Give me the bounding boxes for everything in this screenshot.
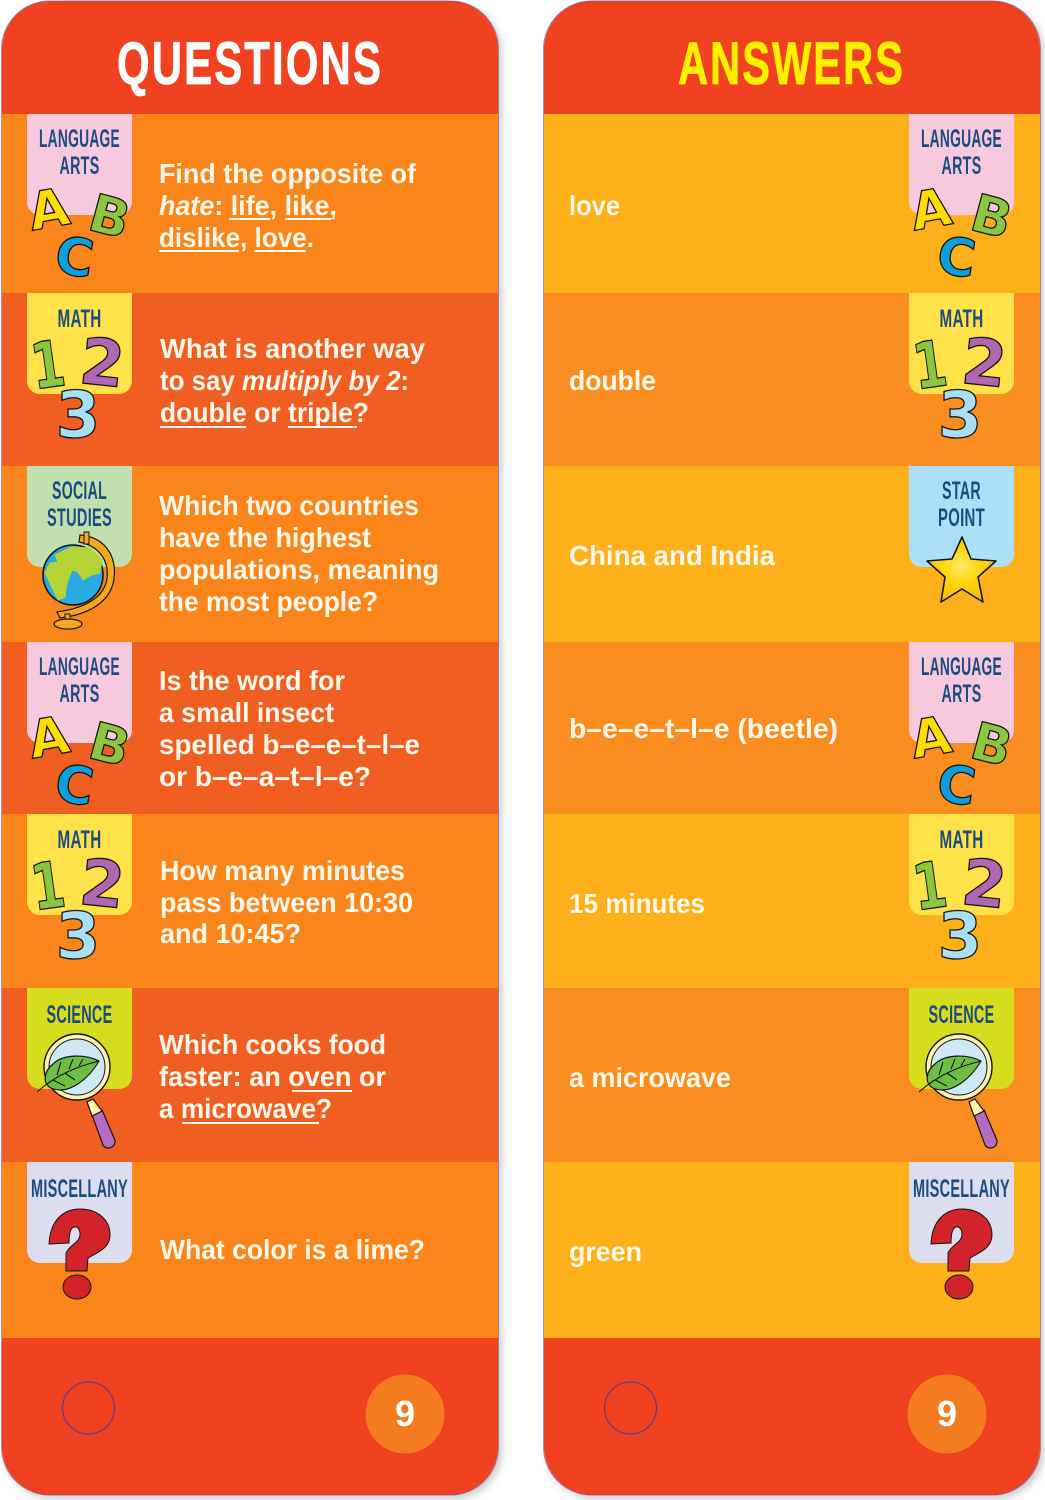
icon: numbers 123: 1 xyxy=(26,326,70,405)
icon: numbers 123 xyxy=(26,846,128,974)
page number badge xyxy=(366,1374,444,1454)
tab: language arts: ARTS xyxy=(942,152,982,180)
punch hole xyxy=(604,1382,656,1434)
icon: letters abc: B xyxy=(964,183,1018,252)
question 7: What color is a lime? xyxy=(160,1234,425,1265)
icon: numbers 123: 2 xyxy=(76,846,128,924)
icon: numbers 123: 3 xyxy=(56,900,100,974)
page number badge: 9 xyxy=(395,1393,415,1434)
question 4: spelled b–e–e–t–l–e xyxy=(159,729,420,760)
tab: math: MATH xyxy=(940,826,984,854)
tab: language arts: ARTS xyxy=(60,680,100,708)
tab: language arts: LANGUAGE xyxy=(39,125,120,153)
tab: language arts xyxy=(24,114,136,291)
icon: numbers 123: 1 xyxy=(26,847,70,926)
icon: numbers 123: 3 xyxy=(938,900,982,974)
tab: science xyxy=(27,988,132,1148)
punch hole xyxy=(62,1382,114,1434)
icon: numbers 123: 3 xyxy=(56,379,100,453)
question 4: or b–e–a–t–l–e? xyxy=(159,761,371,792)
tab: language arts xyxy=(906,642,1018,819)
question 2: double or triple? xyxy=(160,397,369,428)
heading: questions: QUESTIONS xyxy=(117,30,383,97)
icon: letters abc xyxy=(24,705,136,819)
icon: letters abc: B xyxy=(964,711,1018,780)
question 3: Which two countries xyxy=(159,490,419,521)
heading: answers: ANSWERS xyxy=(678,30,905,97)
tab: star point xyxy=(909,466,1014,602)
question 4 xyxy=(159,665,420,792)
tab: science: SCIENCE xyxy=(46,1001,112,1029)
icon: letters abc: B xyxy=(82,711,136,780)
question 4: Is the word for xyxy=(159,665,345,696)
page number badge: 9 xyxy=(937,1393,957,1434)
icon: star xyxy=(927,537,996,602)
question 6 xyxy=(159,1029,386,1124)
question 5 xyxy=(160,855,413,949)
answer 5: 15 minutes xyxy=(569,888,705,919)
question 3 xyxy=(159,490,439,617)
question 2: What is another way xyxy=(160,333,425,364)
question 4: a small insect xyxy=(159,697,334,728)
tab: language arts xyxy=(906,114,1018,291)
icon: globe xyxy=(43,532,114,629)
answer 2: double xyxy=(569,365,656,396)
question 2 xyxy=(160,333,425,428)
icon: numbers 123 xyxy=(908,325,1010,453)
page number badge xyxy=(908,1374,986,1454)
icon: letters abc xyxy=(906,705,1018,819)
icon: letters abc: C xyxy=(933,226,979,291)
tab: math xyxy=(26,814,132,974)
icon: letters abc: C xyxy=(51,226,97,291)
answer 1: love xyxy=(569,190,620,221)
answer 4: b–e–e–t–l–e (beetle) xyxy=(569,713,838,744)
question 6: faster: an oven or xyxy=(159,1061,386,1092)
tab: math xyxy=(908,293,1014,453)
icon: numbers 123 xyxy=(26,325,128,453)
icon: numbers 123: 1 xyxy=(908,847,952,926)
tab: language arts: ARTS xyxy=(60,152,100,180)
question 3: the most people? xyxy=(159,586,378,617)
answer 6: a microwave xyxy=(569,1062,731,1093)
tab: math xyxy=(908,814,1014,974)
icon: question mark xyxy=(49,1209,110,1299)
question 3: populations, meaning xyxy=(159,554,439,585)
icon: letters abc: B xyxy=(82,183,136,252)
icon: letters abc: A xyxy=(906,705,956,771)
icon: letters abc xyxy=(24,177,136,291)
panel: answers card xyxy=(544,1,1040,1495)
answer 7: green xyxy=(569,1236,642,1267)
tab: language arts: LANGUAGE xyxy=(39,653,120,681)
question 5: How many minutes xyxy=(160,855,405,886)
tab: social studies xyxy=(27,466,132,629)
icon: numbers 123: 2 xyxy=(958,846,1010,924)
icon: magnifying glass with leaf xyxy=(37,1034,115,1148)
question 1 xyxy=(159,158,417,253)
tab: math: MATH xyxy=(58,826,102,854)
tab: social studies: SOCIAL xyxy=(52,477,107,505)
tab: social studies: STUDIES xyxy=(47,504,112,532)
tab: language arts xyxy=(24,642,136,819)
panel: questions card xyxy=(2,1,498,1495)
icon: numbers 123: 3 xyxy=(938,379,982,453)
tab: math xyxy=(26,293,132,453)
question 6: Which cooks food xyxy=(159,1029,386,1060)
icon: magnifying glass with leaf xyxy=(919,1034,997,1148)
icon: letters abc: A xyxy=(24,177,74,243)
tab: miscellany xyxy=(909,1162,1014,1299)
icon: letters abc: A xyxy=(24,705,74,771)
icon: letters abc xyxy=(906,177,1018,291)
question 2: to say multiply by 2: xyxy=(160,365,409,396)
question 1: hate: life, like, xyxy=(159,190,337,221)
question 5: and 10:45? xyxy=(160,918,301,949)
tab: star point: POINT xyxy=(938,504,985,532)
question 1: dislike, love. xyxy=(159,222,314,253)
answer 3: China and India xyxy=(569,540,775,571)
icon: numbers 123: 1 xyxy=(908,326,952,405)
tab: math: MATH xyxy=(940,305,984,333)
tab: math: MATH xyxy=(58,305,102,333)
icon: numbers 123: 2 xyxy=(76,325,128,403)
tab: star point: STAR xyxy=(942,477,981,505)
question 1: Find the opposite of xyxy=(159,158,417,189)
icon: numbers 123: 2 xyxy=(958,325,1010,403)
question 3: have the highest xyxy=(159,522,371,553)
icon: numbers 123 xyxy=(908,846,1010,974)
icon: question mark xyxy=(931,1209,992,1299)
icon: letters abc: C xyxy=(933,754,979,819)
tab: miscellany xyxy=(27,1162,132,1299)
tab: miscellany: MISCELLANY xyxy=(31,1175,128,1203)
icon: letters abc: C xyxy=(51,754,97,819)
question 5: pass between 10:30 xyxy=(160,887,413,918)
tab: science: SCIENCE xyxy=(928,1001,994,1029)
tab: language arts: ARTS xyxy=(942,680,982,708)
tab: science xyxy=(909,988,1014,1148)
icon: letters abc: A xyxy=(906,177,956,243)
question 6: a microwave? xyxy=(159,1093,332,1124)
